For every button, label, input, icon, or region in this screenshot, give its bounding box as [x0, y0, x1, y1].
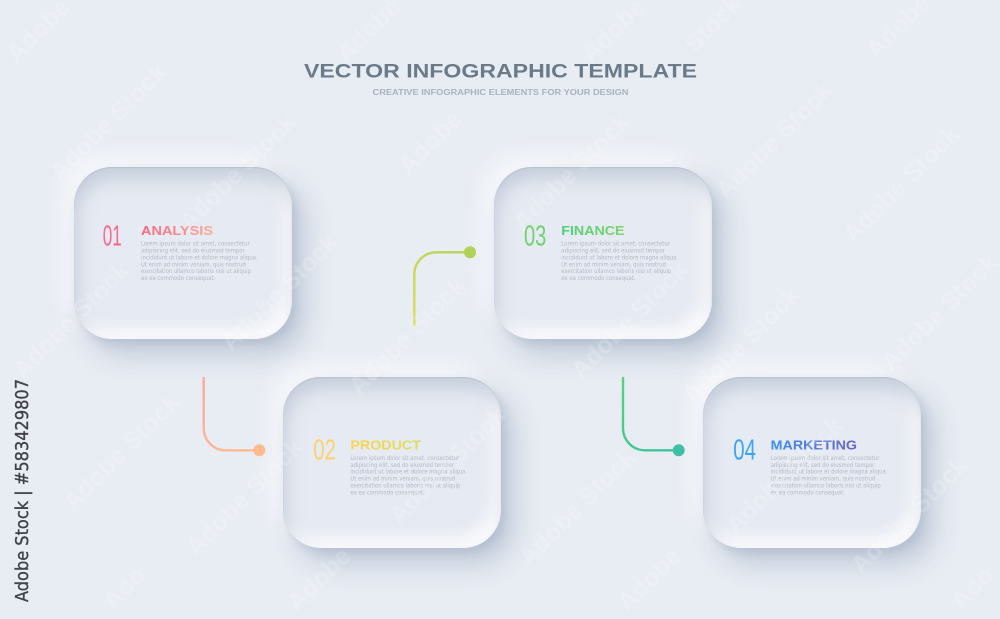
heading: marketing: MARKETING	[771, 437, 857, 452]
body text	[350, 455, 467, 496]
number 04: 04	[733, 435, 756, 467]
body text: Lorem ipsum dolor sit amet, consectetur	[561, 241, 670, 248]
body text: incididunt ut labore et dolore magna aliqua.	[350, 469, 467, 476]
watermarks: Adobe Stock	[215, 228, 343, 356]
body text: adipiscing elit, sed do eiusmod tempor	[561, 248, 665, 254]
body text: Lorem ipsum dolor sit amet, consectetur	[350, 455, 460, 462]
number 01: 01	[103, 221, 122, 253]
body text: ex ea commodo consequat.	[141, 275, 215, 282]
body text	[141, 241, 258, 282]
subtitle: CREATIVE INFOGRAPHIC ELEMENTS FOR YOUR DESIGN	[372, 88, 629, 97]
watermarks: Ado	[97, 561, 151, 615]
watermarks: Adobe Stock	[677, 281, 805, 409]
number 02: 02	[313, 435, 336, 467]
watermarks: Adobe Stock	[710, 76, 838, 204]
title: VECTOR INFOGRAPHIC TEMPLATE	[304, 62, 697, 83]
body text: Ut enim ad minim veniam, quis nostrud	[350, 476, 455, 483]
body text: incididunt ut labore et dolore magna aliqua.	[561, 254, 678, 261]
body text: adipiscing elit, sed do eiusmod tempor	[771, 462, 875, 469]
watermarks: Adobe Stock	[845, 451, 973, 579]
heading: finance: FINANCE	[561, 223, 625, 238]
body text: exercitation ullamco laboris nisi ut aliquip	[350, 482, 461, 490]
arrow: analysis to product	[204, 377, 265, 456]
body text: Ut enim ad minim veniam, quis nostrud	[141, 261, 246, 268]
watermarks: Adobe Stock	[7, 256, 135, 384]
panel: marketing	[703, 377, 921, 548]
watermarks: Ado	[945, 561, 999, 615]
watermarks: Adobe Stock	[565, 256, 693, 384]
body text: adipiscing elit, sed do eiusmod tempor	[141, 248, 245, 254]
side credit: Adobe Stock | #583429807	[13, 379, 33, 602]
body text: adipiscing elit, sed do eiusmod tempor	[350, 462, 455, 469]
body text	[771, 455, 887, 496]
watermarks: Adobe Stock	[383, 401, 511, 529]
body text: ex ea commodo consequat.	[561, 275, 636, 282]
panel: product	[283, 377, 501, 548]
watermarks: Adobe Stock	[57, 388, 185, 516]
watermarks: Adobe Stock	[875, 248, 1000, 376]
watermarks: Adobe	[282, 542, 357, 617]
panel: analysis	[74, 167, 292, 339]
body text: Ut enim ad minim veniam, quis nostrud	[561, 261, 666, 268]
title block	[304, 62, 697, 97]
watermarks: Adobe Stock	[720, 411, 848, 539]
body text: incididunt ut labore et dolore magna aliqua.	[141, 254, 258, 261]
arrow: product to finance	[414, 246, 476, 326]
number 03: 03	[524, 221, 546, 253]
body text: ex ea commodo consequat.	[771, 489, 845, 496]
heading: product: PRODUCT	[350, 437, 421, 452]
watermarks: Adobe	[393, 105, 468, 180]
panel: finance	[494, 167, 712, 339]
arrow: finance to marketing	[623, 377, 685, 456]
body text: Lorem ipsum dolor sit amet, consectetur	[141, 241, 250, 248]
body text: exercitation ullamco laboris nisi ut aliquip	[561, 268, 671, 275]
body text: ex ea commodo consequat.	[350, 489, 425, 496]
watermarks: Adobe Stock	[180, 433, 308, 561]
watermarks: Adobe Stock	[44, 58, 172, 186]
watermarks: Adobe Stock	[513, 443, 641, 571]
body text: exercitation ullamco laboris nisi ut aliquip	[771, 482, 881, 490]
watermarks: Adobe	[612, 542, 687, 617]
body text: Ut enim ad minim veniam, quis nostrud	[771, 476, 876, 483]
body text: incididunt ut labore et dolore magna aliqua.	[771, 469, 887, 476]
heading: analysis: ANALYSIS	[141, 223, 213, 238]
watermarks: Adobe Stock	[837, 120, 965, 248]
body text	[561, 241, 678, 282]
watermarks: Adobe Stock	[173, 108, 301, 236]
body text: exercitation ullamco laboris nisi ut aliquip	[141, 268, 251, 275]
body text: Lorem ipsum dolor sit amet, consectetur	[771, 455, 880, 462]
watermarks: Adobe Stock	[507, 108, 635, 236]
watermarks: Adobe Stock	[343, 272, 471, 400]
